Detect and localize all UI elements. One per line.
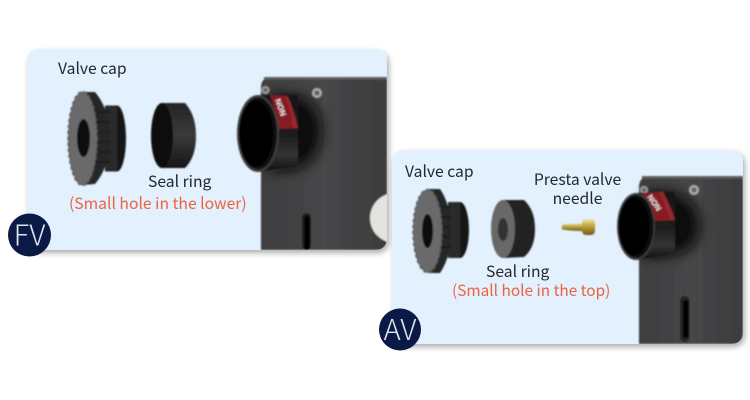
label: Valve cap: Valve cap: [405, 159, 474, 182]
label: Seal ring: Seal ring: [486, 259, 550, 282]
label: Seal ring: Seal ring: [148, 169, 212, 192]
label: Presta valve needle: Presta valve: [534, 167, 621, 190]
badge: FV: FV: [14, 212, 45, 254]
part: valve cap: [68, 92, 126, 186]
panel: FV valve parts: [27, 49, 420, 250]
part: valve cap: [413, 189, 469, 273]
label: small hole in the lower: (Small hole in the lower): [69, 191, 247, 214]
panel: AV valve parts: [392, 150, 743, 344]
part: seal ring: [491, 200, 535, 258]
device: FV valve body with tube: NON: [273, 98, 288, 118]
badge: AV: AV: [384, 307, 416, 349]
part: seal ring: [151, 103, 196, 168]
device: AV valve body with tube: NON: [645, 193, 663, 213]
device: AV valve body with tube: [617, 176, 743, 344]
label: Presta valve needle: needle: [553, 186, 603, 209]
device: FV valve body with tube: [236, 76, 387, 250]
label: small hole in the top: (Small hole in the top): [452, 279, 610, 301]
label: Valve cap: Valve cap: [58, 56, 127, 79]
part: presta valve needle: [562, 219, 595, 235]
